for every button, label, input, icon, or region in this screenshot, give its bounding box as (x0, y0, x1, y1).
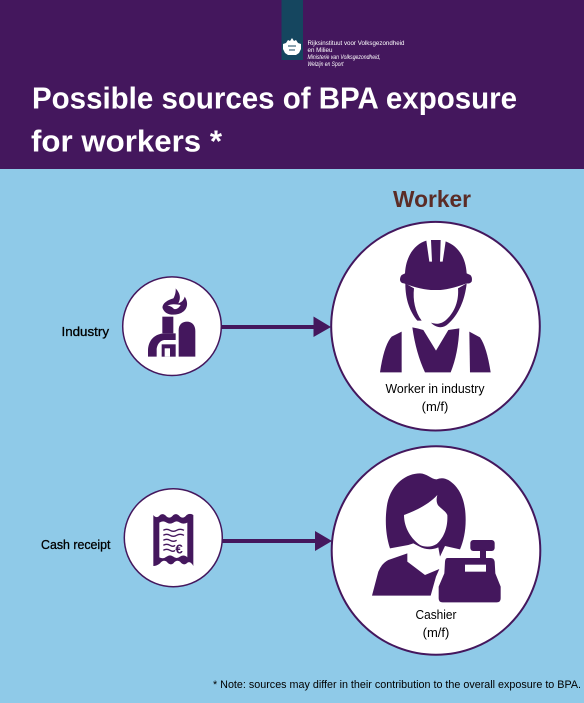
panel: cashier (332, 446, 540, 655)
title: for workers * (31, 124, 223, 158)
text: worker in industry (386, 381, 485, 414)
panel: industry source (123, 277, 221, 376)
icon: factory with flame (148, 288, 195, 357)
text: cashier: (m/f) (423, 625, 449, 640)
logo: Rijksinstituut voor Volksgezondheid (308, 41, 404, 47)
footnote: * Note: sources may differ in their contribution to the overall exposure to BPA. (213, 679, 581, 691)
heading: Worker: Worker (393, 186, 471, 212)
icon: worker with helmet (380, 240, 491, 372)
arrow: industry to worker (221, 316, 331, 337)
title: Possible sources of BPA exposure (32, 80, 517, 116)
text: cashier (416, 607, 457, 640)
panel: cash receipt source (124, 489, 222, 587)
icon: cashier with cash register (372, 473, 501, 602)
text: worker in industry: Worker in industry (386, 381, 485, 396)
arrow: cash receipt to cashier (222, 531, 332, 551)
logo (282, 0, 404, 68)
label: Industry: Industry (62, 324, 110, 339)
logo: Welzijn en Sport (308, 62, 344, 68)
logo: en Milieu (308, 48, 332, 54)
panel: worker in industry (331, 222, 540, 430)
label: Cash receipt: Cash receipt (41, 537, 111, 552)
logo: Ministerie van Volksgezondheid, (308, 55, 380, 61)
text: cashier: Cashier (416, 607, 457, 622)
header band (0, 0, 584, 169)
title (31, 80, 517, 158)
text: worker in industry: (m/f) (422, 399, 448, 414)
icon: receipt with euro sign: € (175, 542, 183, 557)
